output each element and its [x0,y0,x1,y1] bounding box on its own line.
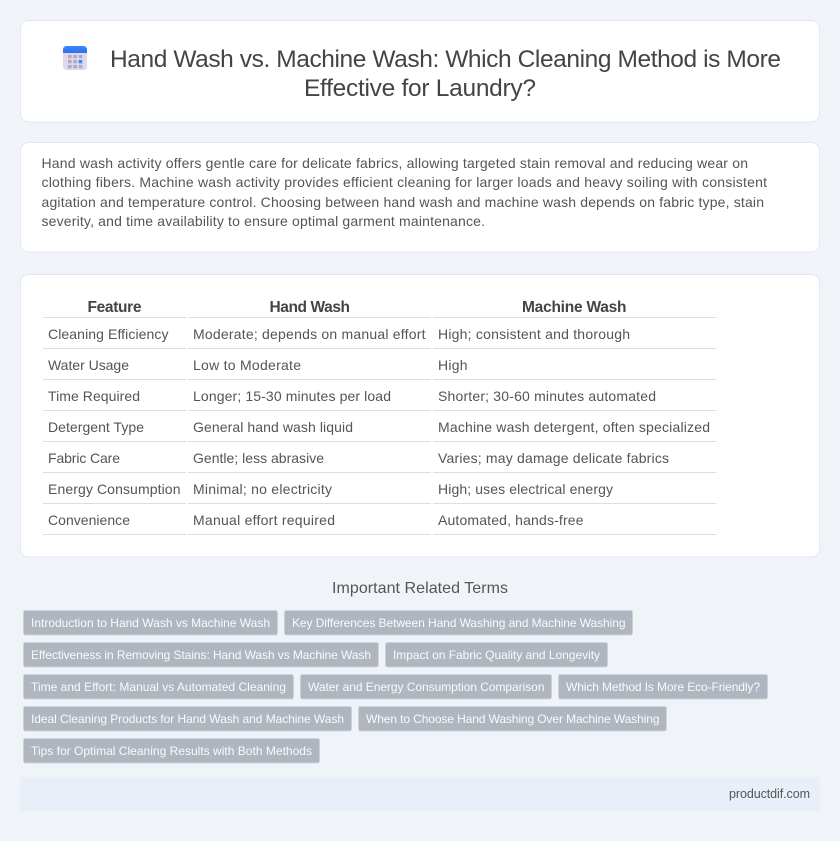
icon: calendar [63,46,87,70]
heading: related terms: Important Related Terms [332,580,508,597]
tag: tips: Tips for Optimal Cleaning Results with Both Methods [31,744,312,758]
row: detergent type: General hand wash liquid [193,419,353,435]
tag: cleaning products: Ideal Cleaning Products for Hand Wash and Machine Wash [31,712,344,726]
panel: comparison table [20,274,820,557]
title [110,46,781,102]
row: time required: Shorter; 30-60 minutes automated [438,388,656,404]
panel: intro paragraph [20,142,820,252]
tag: tips [24,738,320,763]
footer: productdif.com [729,787,810,801]
row: cleaning efficiency: Cleaning Efficiency [48,326,168,342]
text block: intro: clothing fibers. Machine wash activity provides efficient cleaning for larger loads and heavy soiling with consistent [42,174,767,190]
tag: introduction: Introduction to Hand Wash vs Machine Wash [31,616,270,630]
tag: eco-friendly: Which Method Is More Eco-Friendly? [566,680,760,694]
row: time required: Time Required [48,388,140,404]
text block: intro: severity, and time availability to ensure optimal garment maintenance. [42,213,485,229]
footer [20,777,820,811]
row: fabric care: Gentle; less abrasive [193,450,324,466]
row: fabric care: Fabric Care [48,450,120,466]
text block: intro [42,155,767,229]
tag: cleaning products [24,706,352,731]
tag: when to choose: When to Choose Hand Washing Over Machine Washing [366,712,660,726]
text block: intro: agitation and temperature control. Choosing between hand wash and machine wash depends on fabric type, stain [42,194,764,210]
row: energy consumption [48,481,613,497]
tag: water and energy: Water and Energy Consumption Comparison [308,680,544,694]
row: water usage: Water Usage [48,357,129,373]
row: energy consumption: Energy Consumption [48,481,180,497]
row: time required: Longer; 15-30 minutes per load [193,388,391,404]
tag: time and effort: Time and Effort: Manual vs Automated Cleaning [31,680,286,694]
tag: effectiveness [24,642,378,667]
tag: when to choose [358,706,666,731]
row: cleaning efficiency: High; consistent and thorough [438,326,630,342]
panel: header [20,20,820,122]
tag: introduction [24,610,278,635]
row: energy consumption: Minimal; no electricity [193,481,332,497]
text block: intro: Hand wash activity offers gentle care for delicate fabrics, allowing targeted stain removal and reducing wear on [42,155,748,171]
tag: effectiveness: Effectiveness in Removing Stains: Hand Wash vs Machine Wash [31,648,371,662]
row: cleaning efficiency [48,326,630,342]
tag: fabric quality: Impact on Fabric Quality and Longevity [393,648,600,662]
row: water usage: Low to Moderate [193,357,301,373]
row: cleaning efficiency: Moderate; depends on manual effort [193,326,426,342]
row: detergent type [48,419,710,435]
row: water usage [48,357,468,373]
row: convenience [48,512,584,528]
row: detergent type: Detergent Type [48,419,144,435]
row: convenience: Manual effort required [193,512,335,528]
tag: key differences [284,610,632,635]
title: Effective for Laundry? [304,75,536,102]
table header: Hand Wash [270,299,350,316]
row: water usage: High [438,357,468,373]
tag: water and energy [300,674,552,699]
row: energy consumption: High; uses electrical energy [438,481,613,497]
tag: fabric quality [386,642,608,667]
tag: time and effort [24,674,294,699]
table header: Machine Wash [522,299,626,316]
row: convenience: Convenience [48,512,130,528]
row: detergent type: Machine wash detergent, often specialized [438,419,710,435]
row: fabric care [48,450,669,466]
row: convenience: Automated, hands-free [438,512,584,528]
table header: Feature [88,299,142,316]
tag: eco-friendly [558,674,768,699]
tag group: related terms [24,610,768,763]
title: Hand Wash vs. Machine Wash: Which Cleaning Method is More [110,46,781,73]
row: fabric care: Varies; may damage delicate fabrics [438,450,669,466]
row: time required [48,388,656,404]
table header [88,299,626,316]
tag: key differences: Key Differences Between Hand Washing and Machine Washing [292,616,626,630]
